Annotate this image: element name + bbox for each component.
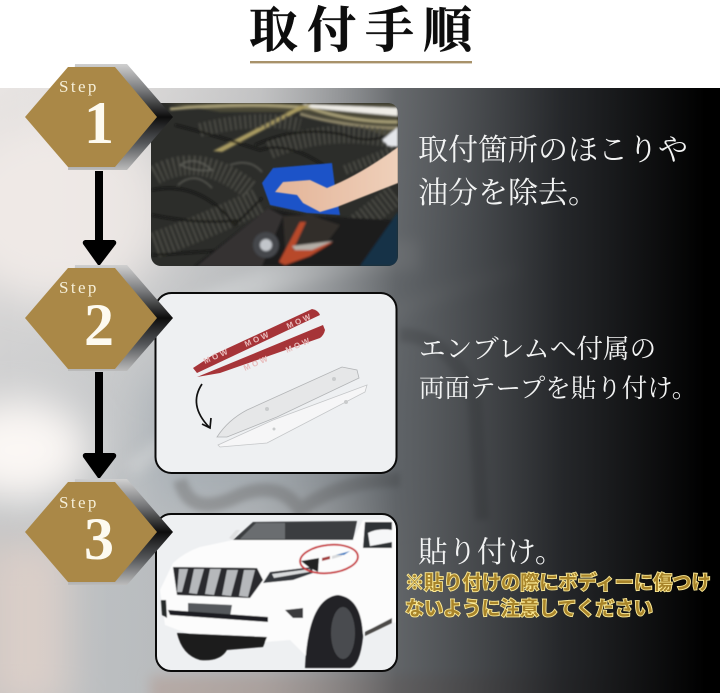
text: step 3 instruction: 貼り付け。 (418, 536, 564, 569)
icon: clear emblem pieces (217, 367, 367, 447)
panel: step 2 emblem tape (156, 293, 396, 473)
bumper (188, 603, 232, 617)
text: step 2 instruction: 両面テープを貼り付け。 (419, 374, 697, 403)
icon: red adhesive tape: MOW (202, 346, 231, 366)
icon: red adhesive tape (193, 309, 325, 377)
text: step 1 instruction (418, 134, 688, 210)
headlight (263, 567, 313, 583)
step 1 badge (25, 64, 173, 170)
step 1 badge: 1 (84, 90, 114, 156)
top reflections (170, 103, 398, 136)
wheel (305, 595, 363, 668)
arrow: curved tape to emblem (196, 384, 211, 428)
red highlight ring (299, 542, 359, 576)
panel: step 1 photo, wiping the hood (151, 103, 398, 266)
step 3 badge (25, 479, 173, 585)
callout: yellow caution note: ※貼り付けの際にボディーに傷つけ (405, 571, 711, 594)
text: step 2 instruction (419, 334, 697, 403)
white SUV body (160, 520, 397, 660)
grille (173, 567, 263, 598)
icon: hand and arm (275, 147, 398, 212)
step 2 badge: Step (59, 278, 99, 297)
headlight area (194, 208, 398, 266)
emblem on fender (301, 558, 319, 572)
hood stripes (155, 121, 395, 245)
icon: red adhesive tape: MOW (284, 335, 313, 355)
icon: red adhesive tape: MOW (285, 311, 314, 331)
step 2 badge: 2 (84, 292, 114, 358)
callout: yellow caution note (405, 571, 711, 620)
title: 取付手順 (249, 3, 481, 58)
step 1 badge: Step (59, 77, 99, 96)
icon: red adhesive tape: MOW (243, 329, 272, 349)
icon: red adhesive tape: MOW (242, 353, 271, 373)
arrow: step 2 to step 3 (83, 372, 116, 478)
icon: blue cloth (262, 163, 340, 215)
step 3 badge: 3 (84, 506, 114, 572)
step 2 badge (25, 265, 173, 371)
arrow: step 1 to step 2 (83, 171, 116, 265)
panel: step 3 white vehicle (156, 514, 397, 671)
text: step 1 instruction: 油分を除去。 (418, 177, 598, 210)
callout: yellow caution note: ないように注意してください (405, 598, 653, 620)
text: step 2 instruction: エンブレムへ付属の (419, 334, 656, 364)
text: step 1 instruction: 取付箇所のほこりや (418, 134, 688, 167)
step 3 badge: Step (59, 493, 99, 512)
